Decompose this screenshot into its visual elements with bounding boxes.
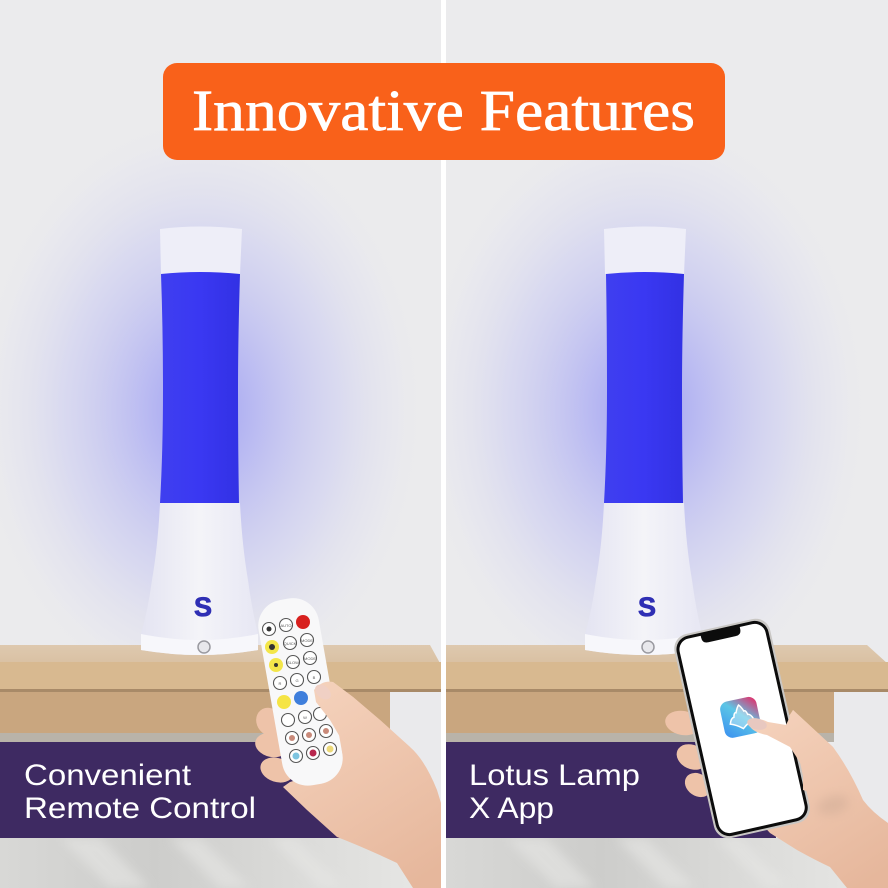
caption text: X App bbox=[469, 792, 554, 825]
lava lamp: S bbox=[194, 592, 212, 622]
bed bbox=[446, 838, 888, 888]
caption text: Remote Control bbox=[24, 792, 256, 825]
wood table bbox=[0, 645, 441, 742]
icon: remote control: R bbox=[279, 681, 282, 686]
icon: remote control: AUTO bbox=[280, 623, 292, 628]
caption band bbox=[0, 742, 340, 838]
divider bbox=[441, 0, 446, 888]
title banner: Innovative Features bbox=[192, 78, 695, 143]
icon: remote control: QUICK bbox=[284, 641, 297, 646]
icon: remote control: W bbox=[303, 715, 307, 720]
icon: remote control: SLOW bbox=[287, 660, 299, 665]
lava lamp bbox=[585, 226, 702, 655]
wood table bbox=[446, 645, 888, 742]
icon: thumb on phone bbox=[747, 710, 845, 814]
caption band bbox=[446, 742, 776, 838]
icon: remote control: MODE bbox=[304, 656, 316, 661]
lamp glow bbox=[474, 187, 814, 620]
icon: remote control: MODE bbox=[301, 638, 313, 643]
icon: thumb on remote bbox=[314, 682, 410, 754]
icon: fingers and palm behind phone bbox=[663, 708, 888, 888]
caption text bbox=[470, 764, 639, 824]
icon: Lotus Lamp app bbox=[720, 696, 760, 738]
caption text: Convenient bbox=[24, 759, 192, 792]
icon: phone bbox=[671, 616, 813, 841]
icon: remote control bbox=[258, 598, 343, 786]
lamp glow bbox=[30, 187, 370, 620]
bed bbox=[0, 838, 441, 888]
lava lamp: S bbox=[638, 592, 656, 622]
panel: remote control scene bbox=[0, 0, 441, 888]
icon: remote control: B bbox=[313, 675, 316, 680]
title banner bbox=[163, 63, 725, 160]
icon: fingers and palm behind remote bbox=[250, 682, 441, 888]
caption text bbox=[26, 764, 254, 818]
panel: app scene bbox=[419, 0, 888, 888]
caption text: Lotus Lamp bbox=[469, 759, 640, 792]
lava lamp bbox=[141, 226, 258, 655]
icon: remote control: G bbox=[295, 678, 299, 683]
